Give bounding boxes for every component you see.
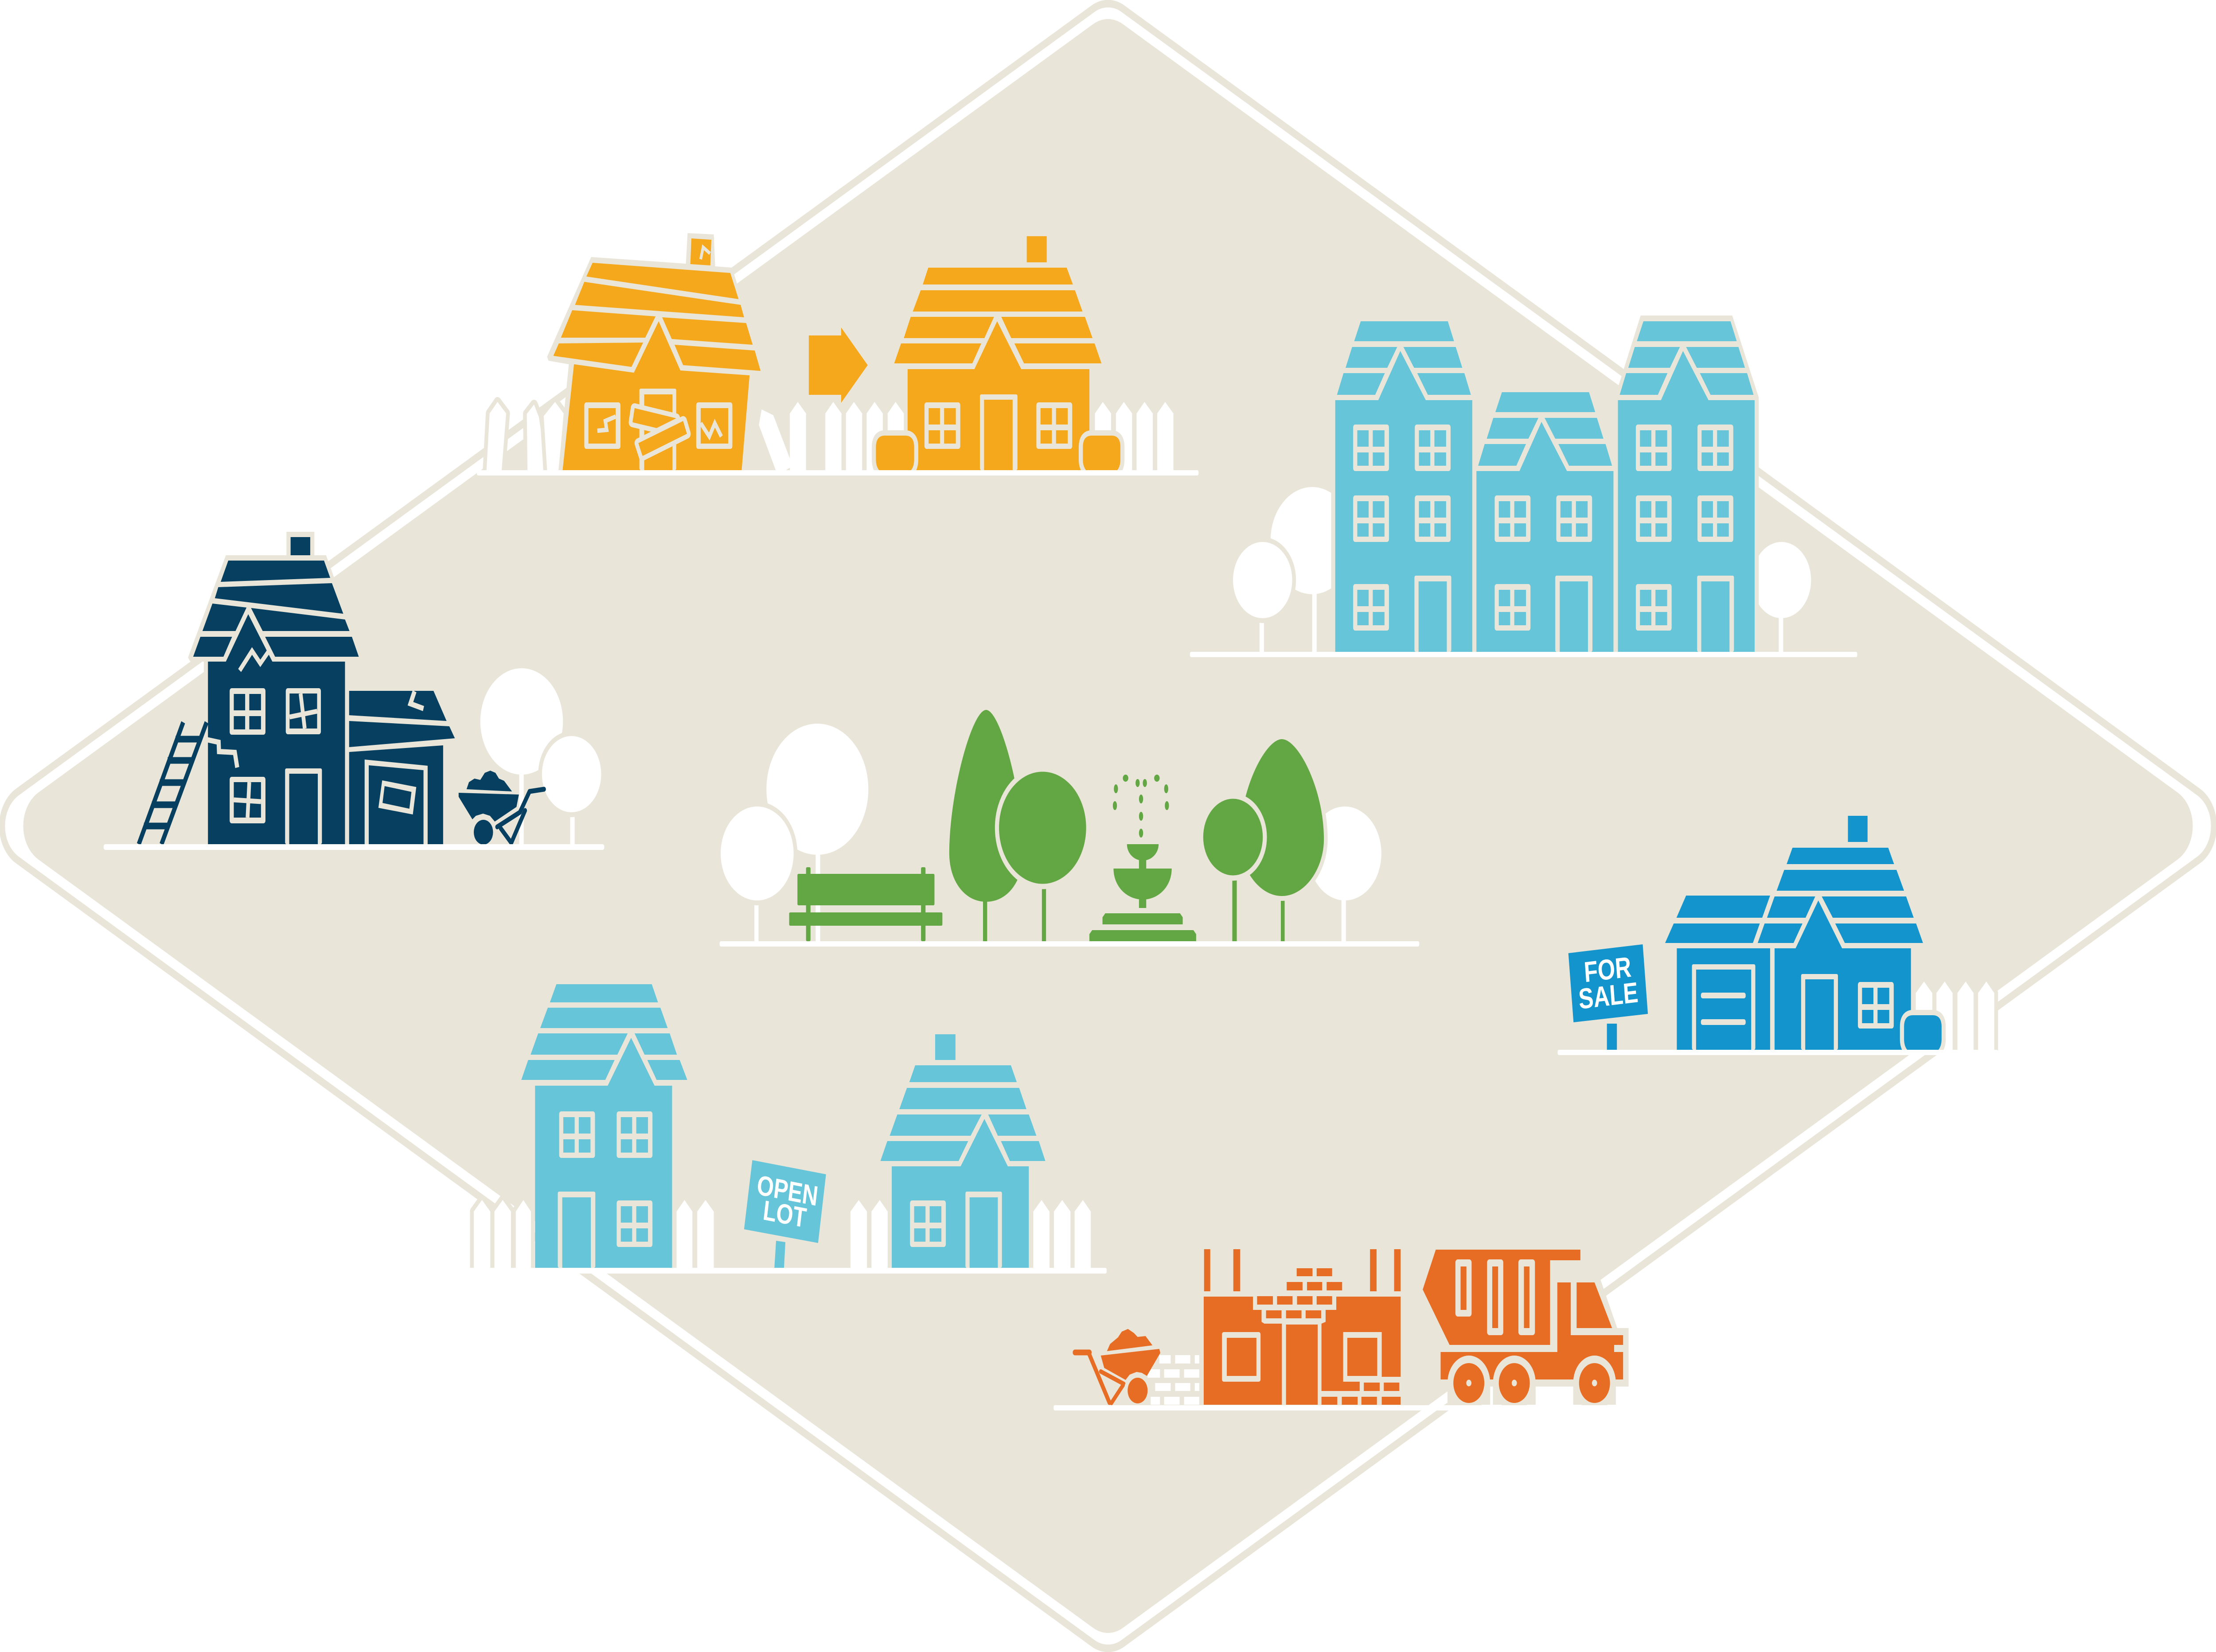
for sale sign — [1568, 944, 1648, 1050]
row halo — [1331, 316, 1759, 652]
door — [980, 394, 1018, 470]
garage roof — [349, 691, 447, 721]
body — [562, 321, 749, 470]
ground line — [1053, 1405, 1618, 1410]
ground line — [1558, 1050, 1998, 1055]
garage body — [349, 745, 443, 844]
bench — [789, 867, 942, 941]
door — [965, 1192, 1002, 1268]
bricks — [1257, 1268, 1401, 1405]
tub — [459, 793, 519, 822]
cab and chassis — [1440, 1282, 1623, 1379]
body — [535, 1038, 672, 1268]
ladder — [139, 722, 207, 844]
tub — [1101, 1349, 1160, 1380]
gable crack — [240, 651, 269, 670]
chimney — [291, 537, 310, 555]
garage door — [1692, 964, 1756, 1050]
renovated yellow house — [876, 236, 1120, 470]
scene: blue house for sale — [1558, 816, 1998, 1055]
chimney — [1027, 236, 1047, 262]
house — [1665, 816, 1942, 1050]
scene: green park — [720, 710, 1419, 947]
dirt — [1107, 1329, 1152, 1351]
door — [640, 389, 676, 470]
broken yellow house — [547, 233, 765, 470]
garage — [349, 691, 455, 844]
scene: light blue row houses — [1190, 316, 1857, 657]
small green tree — [1203, 799, 1263, 941]
chimney — [1848, 816, 1868, 842]
ground line — [477, 470, 1198, 475]
body — [908, 321, 1089, 470]
house halo — [547, 233, 765, 470]
cab window — [1576, 1282, 1612, 1328]
open lot sign: OPEN — [755, 1169, 820, 1212]
garage body — [1677, 948, 1770, 1050]
chimney crack — [701, 247, 710, 259]
right window pane — [1347, 1338, 1377, 1376]
fence, right of broken house — [759, 402, 1174, 470]
body — [892, 1119, 1029, 1268]
left window — [1222, 1332, 1260, 1382]
white brick stack — [1147, 1355, 1199, 1405]
roof — [1665, 848, 1923, 943]
ground line — [469, 1268, 1107, 1274]
ground line — [1190, 652, 1857, 657]
wheel — [474, 820, 493, 845]
scene: light blue houses with open lot — [469, 984, 1107, 1274]
bed slots — [1455, 1259, 1535, 1335]
truck halo — [1440, 1278, 1629, 1387]
scene: damaged navy house — [104, 532, 604, 850]
tall house — [521, 984, 687, 1268]
wheels — [1447, 1356, 1616, 1410]
roof — [880, 1065, 1046, 1161]
house A — [1335, 321, 1472, 652]
main body — [1775, 900, 1911, 1050]
small house — [880, 1034, 1046, 1268]
water droplets — [1113, 775, 1169, 838]
open lot sign — [744, 1160, 826, 1268]
navy house — [193, 537, 359, 844]
handle — [497, 789, 544, 843]
white trees — [721, 724, 1381, 941]
fountain — [1089, 775, 1196, 941]
window — [910, 1200, 946, 1247]
scene: orange construction site — [1053, 1249, 1629, 1410]
fence — [1916, 982, 1994, 1050]
left window — [584, 402, 620, 449]
wheelbarrow — [459, 771, 544, 845]
wall crack — [207, 740, 237, 768]
for sale sign: FOR — [1583, 951, 1632, 989]
body — [208, 614, 345, 844]
garage door window — [378, 780, 416, 814]
roof — [521, 984, 687, 1080]
door — [1286, 1325, 1318, 1405]
left wall — [1204, 1297, 1282, 1405]
roof — [193, 561, 359, 657]
door — [558, 1192, 595, 1268]
ground line — [720, 941, 1419, 947]
row houses — [1335, 321, 1755, 652]
fence segments — [677, 1200, 1091, 1268]
roof — [553, 263, 761, 371]
wheel halos — [1447, 1356, 1616, 1405]
wheel — [1128, 1378, 1147, 1403]
roof — [894, 268, 1101, 363]
chimney — [691, 238, 711, 265]
dirt — [467, 771, 512, 791]
window — [1858, 982, 1894, 1029]
bush right — [1083, 436, 1120, 470]
window right — [1036, 402, 1072, 449]
white trees — [480, 668, 601, 844]
window left — [925, 402, 960, 449]
boarded door planks — [632, 408, 687, 456]
house halo — [188, 532, 363, 662]
wheelbarrow — [1075, 1329, 1160, 1403]
wall halo — [204, 658, 209, 685]
ground line — [104, 844, 604, 850]
garage door — [365, 760, 428, 844]
windows — [559, 1111, 595, 1158]
tall green tree right — [1240, 739, 1324, 941]
roof crack — [410, 691, 424, 709]
open lot sign: LOT — [761, 1194, 808, 1234]
fence — [474, 1200, 531, 1268]
bush left — [876, 436, 914, 470]
tall green tree left — [949, 710, 1023, 941]
dump truck — [1423, 1250, 1629, 1410]
right wall — [1322, 1297, 1401, 1391]
cracked window lower — [230, 777, 265, 823]
for sale sign: SALE — [1577, 976, 1639, 1015]
brick building under construction — [1204, 1249, 1401, 1405]
door — [285, 768, 322, 844]
right window — [696, 402, 732, 449]
white trees — [1233, 487, 1811, 652]
round green tree — [999, 772, 1086, 941]
cracked window — [286, 688, 321, 734]
dump bed — [1423, 1250, 1580, 1345]
ground line front — [1439, 1405, 1625, 1410]
window — [230, 688, 265, 735]
bush — [1904, 1015, 1942, 1050]
handle — [1075, 1352, 1124, 1403]
arrow — [809, 327, 868, 403]
house C — [1618, 321, 1755, 652]
house B — [1476, 392, 1613, 652]
scene: run-down yellow house to renovated yellow house — [477, 233, 1198, 475]
chimney — [935, 1034, 956, 1060]
door — [1801, 974, 1838, 1050]
posts — [1204, 1249, 1401, 1291]
broken fence, left — [487, 402, 564, 470]
